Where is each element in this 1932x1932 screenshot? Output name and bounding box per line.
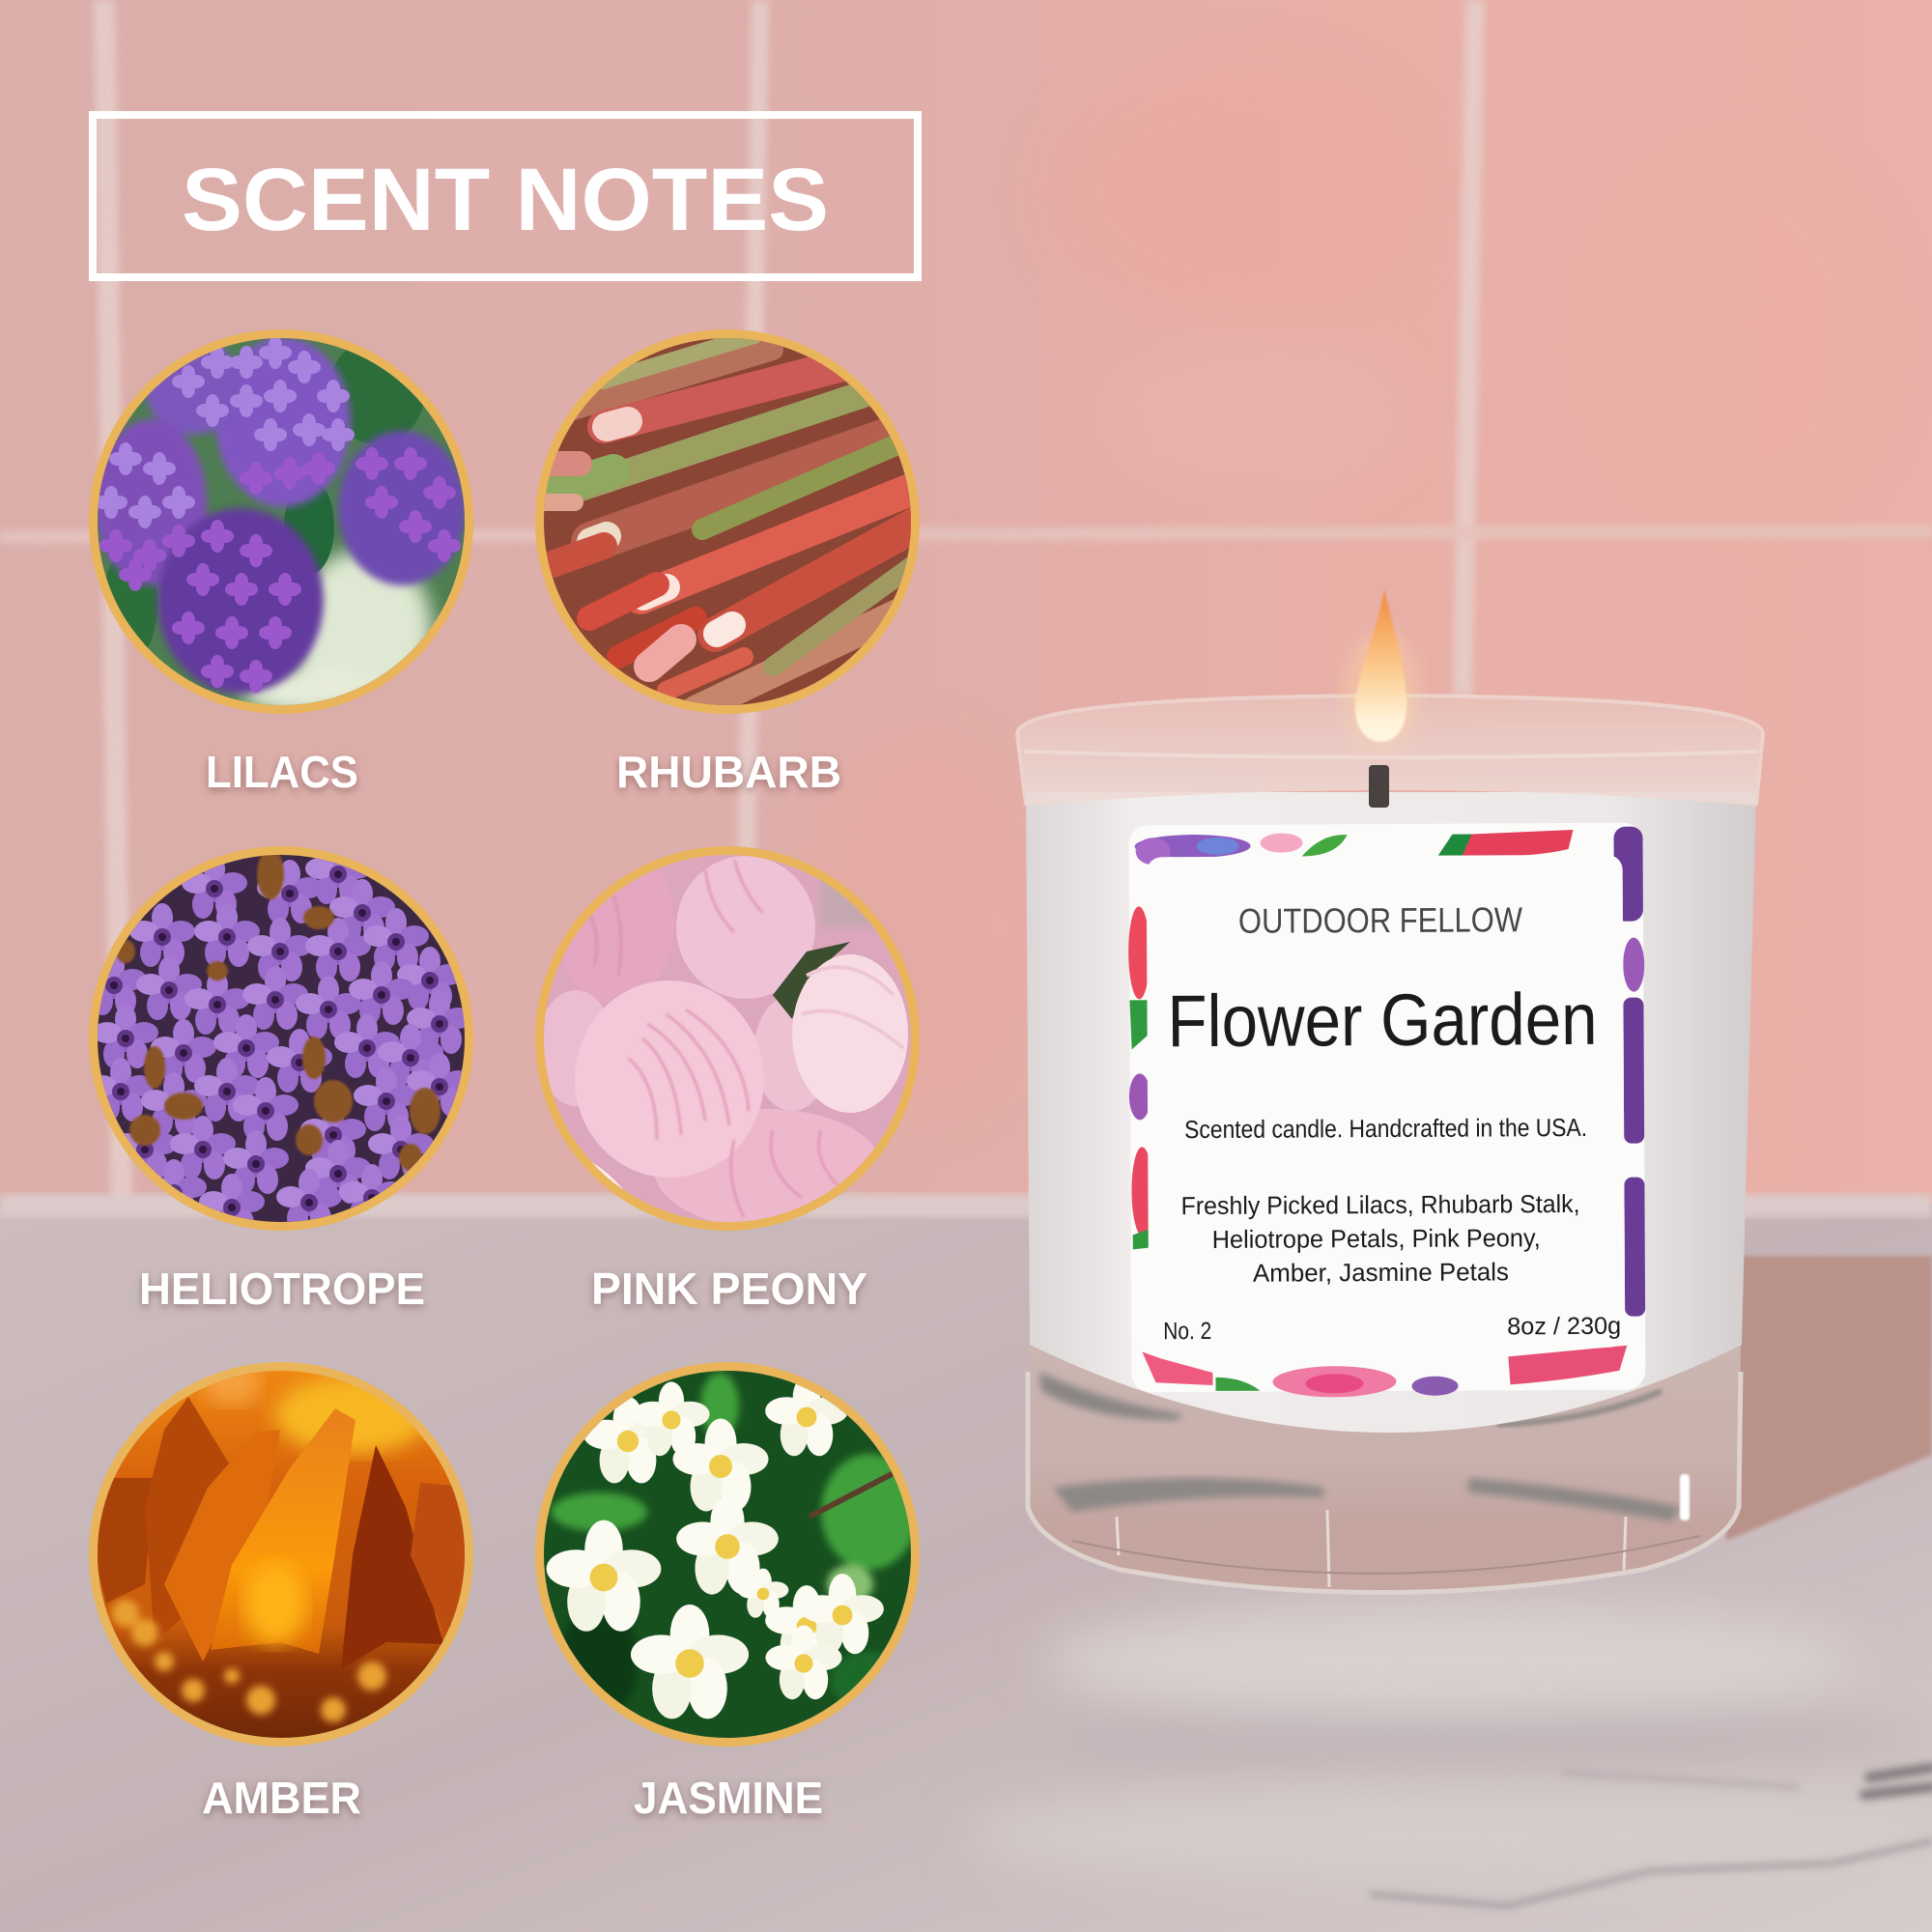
scent circle: jasmine (534, 1362, 921, 1748)
label: pink peony: PINK PEONY (591, 1264, 867, 1314)
base refractions (1039, 1372, 1700, 1587)
scent circle: heliotrope (81, 840, 473, 1237)
label: heliotrope: HELIOTROPE (139, 1264, 425, 1314)
title box (93, 115, 918, 277)
flame (1355, 589, 1406, 742)
background: pink tile wall (0, 0, 1932, 1208)
candle label (1127, 823, 1647, 1398)
title: SCENT NOTES (182, 151, 829, 249)
brand name: OUTDOOR FELLOW (1238, 899, 1522, 941)
floral border (1127, 827, 1647, 1398)
scent circle: lilacs (87, 328, 473, 716)
scent circle: amber (87, 1358, 473, 1748)
background: marble counter (0, 1194, 1932, 1932)
ingredients: Freshly Picked Lilacs, Rhubarb Stalk, (1180, 1189, 1580, 1220)
candle jar (1017, 589, 1763, 1592)
upper glass (1017, 696, 1763, 804)
wick (1369, 765, 1389, 808)
scent circle: pink peony (534, 840, 921, 1232)
product name: Flower Garden (1167, 979, 1598, 1063)
label: amber: AMBER (202, 1773, 361, 1823)
number: No. 2 (1163, 1318, 1211, 1345)
scent circle: rhubarb (534, 328, 921, 715)
ingredients: Heliotrope Petals, Pink Peony, (1212, 1223, 1541, 1254)
label white panel (1147, 855, 1625, 1350)
label: lilacs: LILACS (206, 747, 358, 797)
ingredients: Amber, Jasmine Petals (1253, 1257, 1509, 1288)
glass rim (1024, 752, 1758, 757)
glass base (1028, 1338, 1741, 1592)
tagline: Scented candle. Handcrafted in the USA. (1184, 1113, 1587, 1144)
label: rhubarb: RHUBARB (616, 747, 841, 797)
label: jasmine: JASMINE (634, 1773, 823, 1823)
weight: 8oz / 230g (1507, 1313, 1621, 1340)
flame glow (1343, 631, 1420, 751)
candle shadow on counter (1719, 1256, 1932, 1541)
wax body (1026, 792, 1756, 1433)
ingredients (1180, 1189, 1580, 1288)
